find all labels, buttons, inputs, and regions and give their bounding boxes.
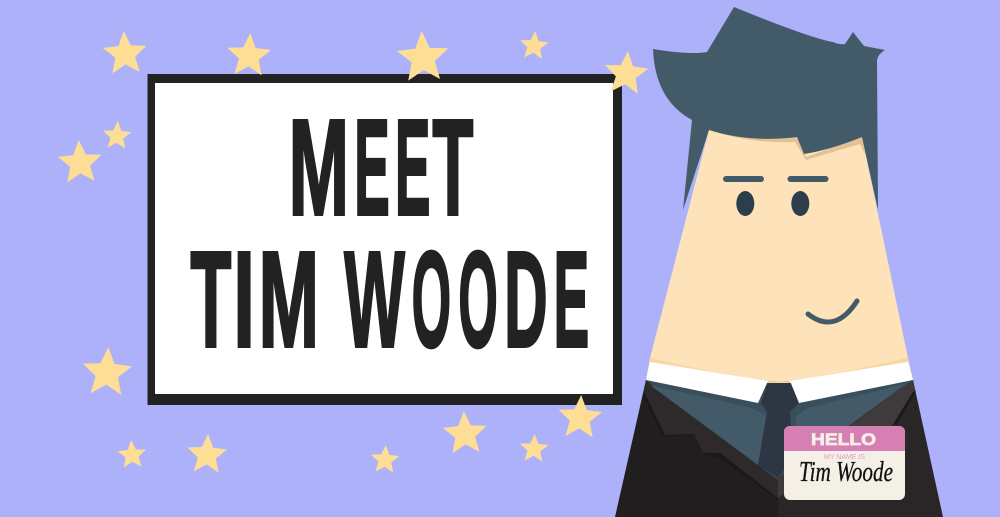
handwritten name: Tim Woode: [799, 456, 893, 488]
shirt: [646, 380, 913, 480]
sign heading: E: [395, 90, 430, 244]
eyebrows: [723, 176, 828, 182]
jacket: [615, 380, 943, 517]
sign heading: W: [344, 222, 405, 376]
neck and face: [646, 130, 913, 382]
necktie: [758, 381, 799, 478]
smile: [808, 301, 857, 322]
hair shadow on forehead: [709, 130, 868, 160]
sign heading: M: [289, 90, 349, 244]
my name is label: MY NAME IS: [824, 454, 865, 461]
character: Tim Woode: [615, 7, 943, 517]
sign heading: D: [504, 222, 548, 376]
sign heading: E: [354, 90, 390, 244]
name tag: [784, 426, 905, 500]
eyes: [736, 191, 809, 216]
hair: [653, 7, 885, 210]
hello label: HELLO: [811, 430, 876, 449]
collar: [646, 362, 913, 403]
sign heading: O: [458, 222, 498, 376]
sign heading: O: [412, 222, 451, 376]
neck shadow: [649, 357, 909, 383]
sign heading: T: [432, 90, 473, 244]
sign heading: [190, 90, 589, 376]
stars: [57, 30, 650, 473]
sign heading: I: [233, 222, 255, 376]
sign panel: [148, 74, 622, 405]
sign heading: T: [190, 222, 231, 376]
sign heading: M: [259, 222, 319, 376]
sign panel: E: [554, 222, 589, 376]
